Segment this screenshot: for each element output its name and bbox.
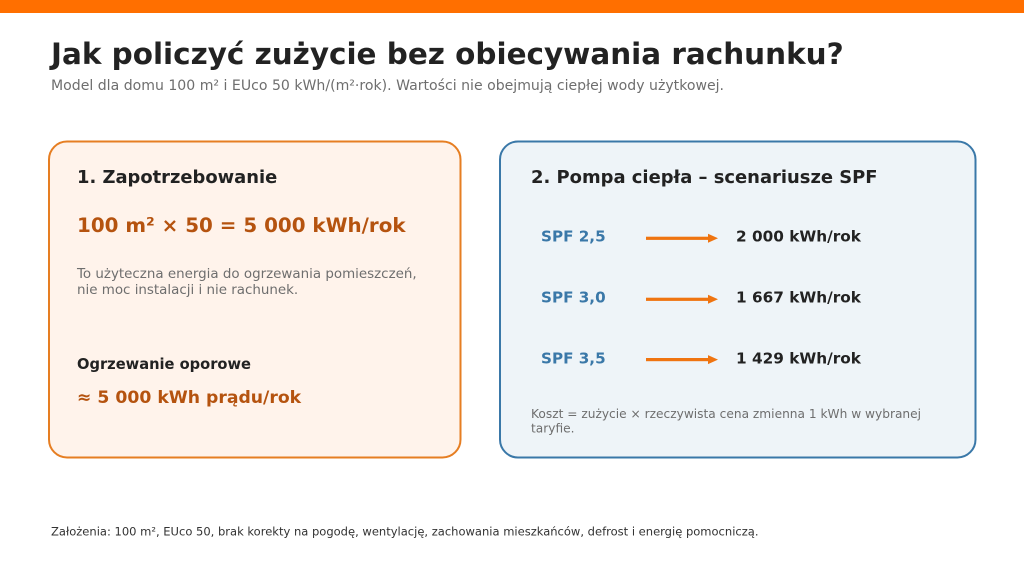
row: SPF 2,5: 2 000 kWh/rok — [736, 228, 862, 246]
row: SPF 2,5 — [541, 228, 862, 246]
arrow — [646, 234, 718, 243]
demand explanation: To użyteczna energia do ogrzewania pomieszczeń, — [76, 266, 417, 282]
row: SPF 3,5: SPF 3,5 — [541, 350, 606, 368]
top accent bar — [0, 0, 1024, 13]
panel: heat pump — [500, 142, 976, 458]
panel heading: demand: 1. Zapotrzebowanie — [77, 167, 277, 188]
panel: demand — [49, 142, 460, 458]
arrow — [646, 295, 718, 304]
subtitle: Model dla domu 100 m² i EUco 50 kWh/(m²·rok). Wartości nie obejmują ciepłej wody użytkowej. — [51, 78, 724, 94]
row: SPF 3,5 — [541, 350, 862, 368]
panel heading: heat pump: 2. Pompa ciepła – scenariusze SPF — [531, 167, 878, 188]
demand formula: 100 m² × 50 = 5 000 kWh/rok — [77, 214, 406, 237]
cost note: Koszt = zużycie × rzeczywista cena zmienna 1 kWh w wybranej — [531, 407, 921, 421]
title: Jak policzyć zużycie bez obiecywania rachunku? — [49, 37, 844, 71]
resistive heating label: Ogrzewanie oporowe — [77, 356, 251, 373]
arrow — [646, 355, 718, 364]
row: SPF 2,5: SPF 2,5 — [541, 228, 606, 246]
row: SPF 3,5: 1 429 kWh/rok — [736, 350, 862, 368]
panel: heat pump: taryfie. — [531, 422, 575, 436]
footnote: Założenia: 100 m², EUco 50, brak korekty na pogodę, wentylację, zachowania mieszkańców, defrost i energię pomocniczą. — [51, 524, 758, 538]
resistive heating value: ≈ 5 000 kWh prądu/rok — [77, 388, 302, 408]
row: SPF 3,0 — [541, 288, 862, 306]
row: SPF 3,0: 1 667 kWh/rok — [736, 288, 862, 306]
panel: demand: nie moc instalacji i nie rachunek. — [77, 283, 298, 298]
row: SPF 3,0: SPF 3,0 — [541, 288, 606, 306]
